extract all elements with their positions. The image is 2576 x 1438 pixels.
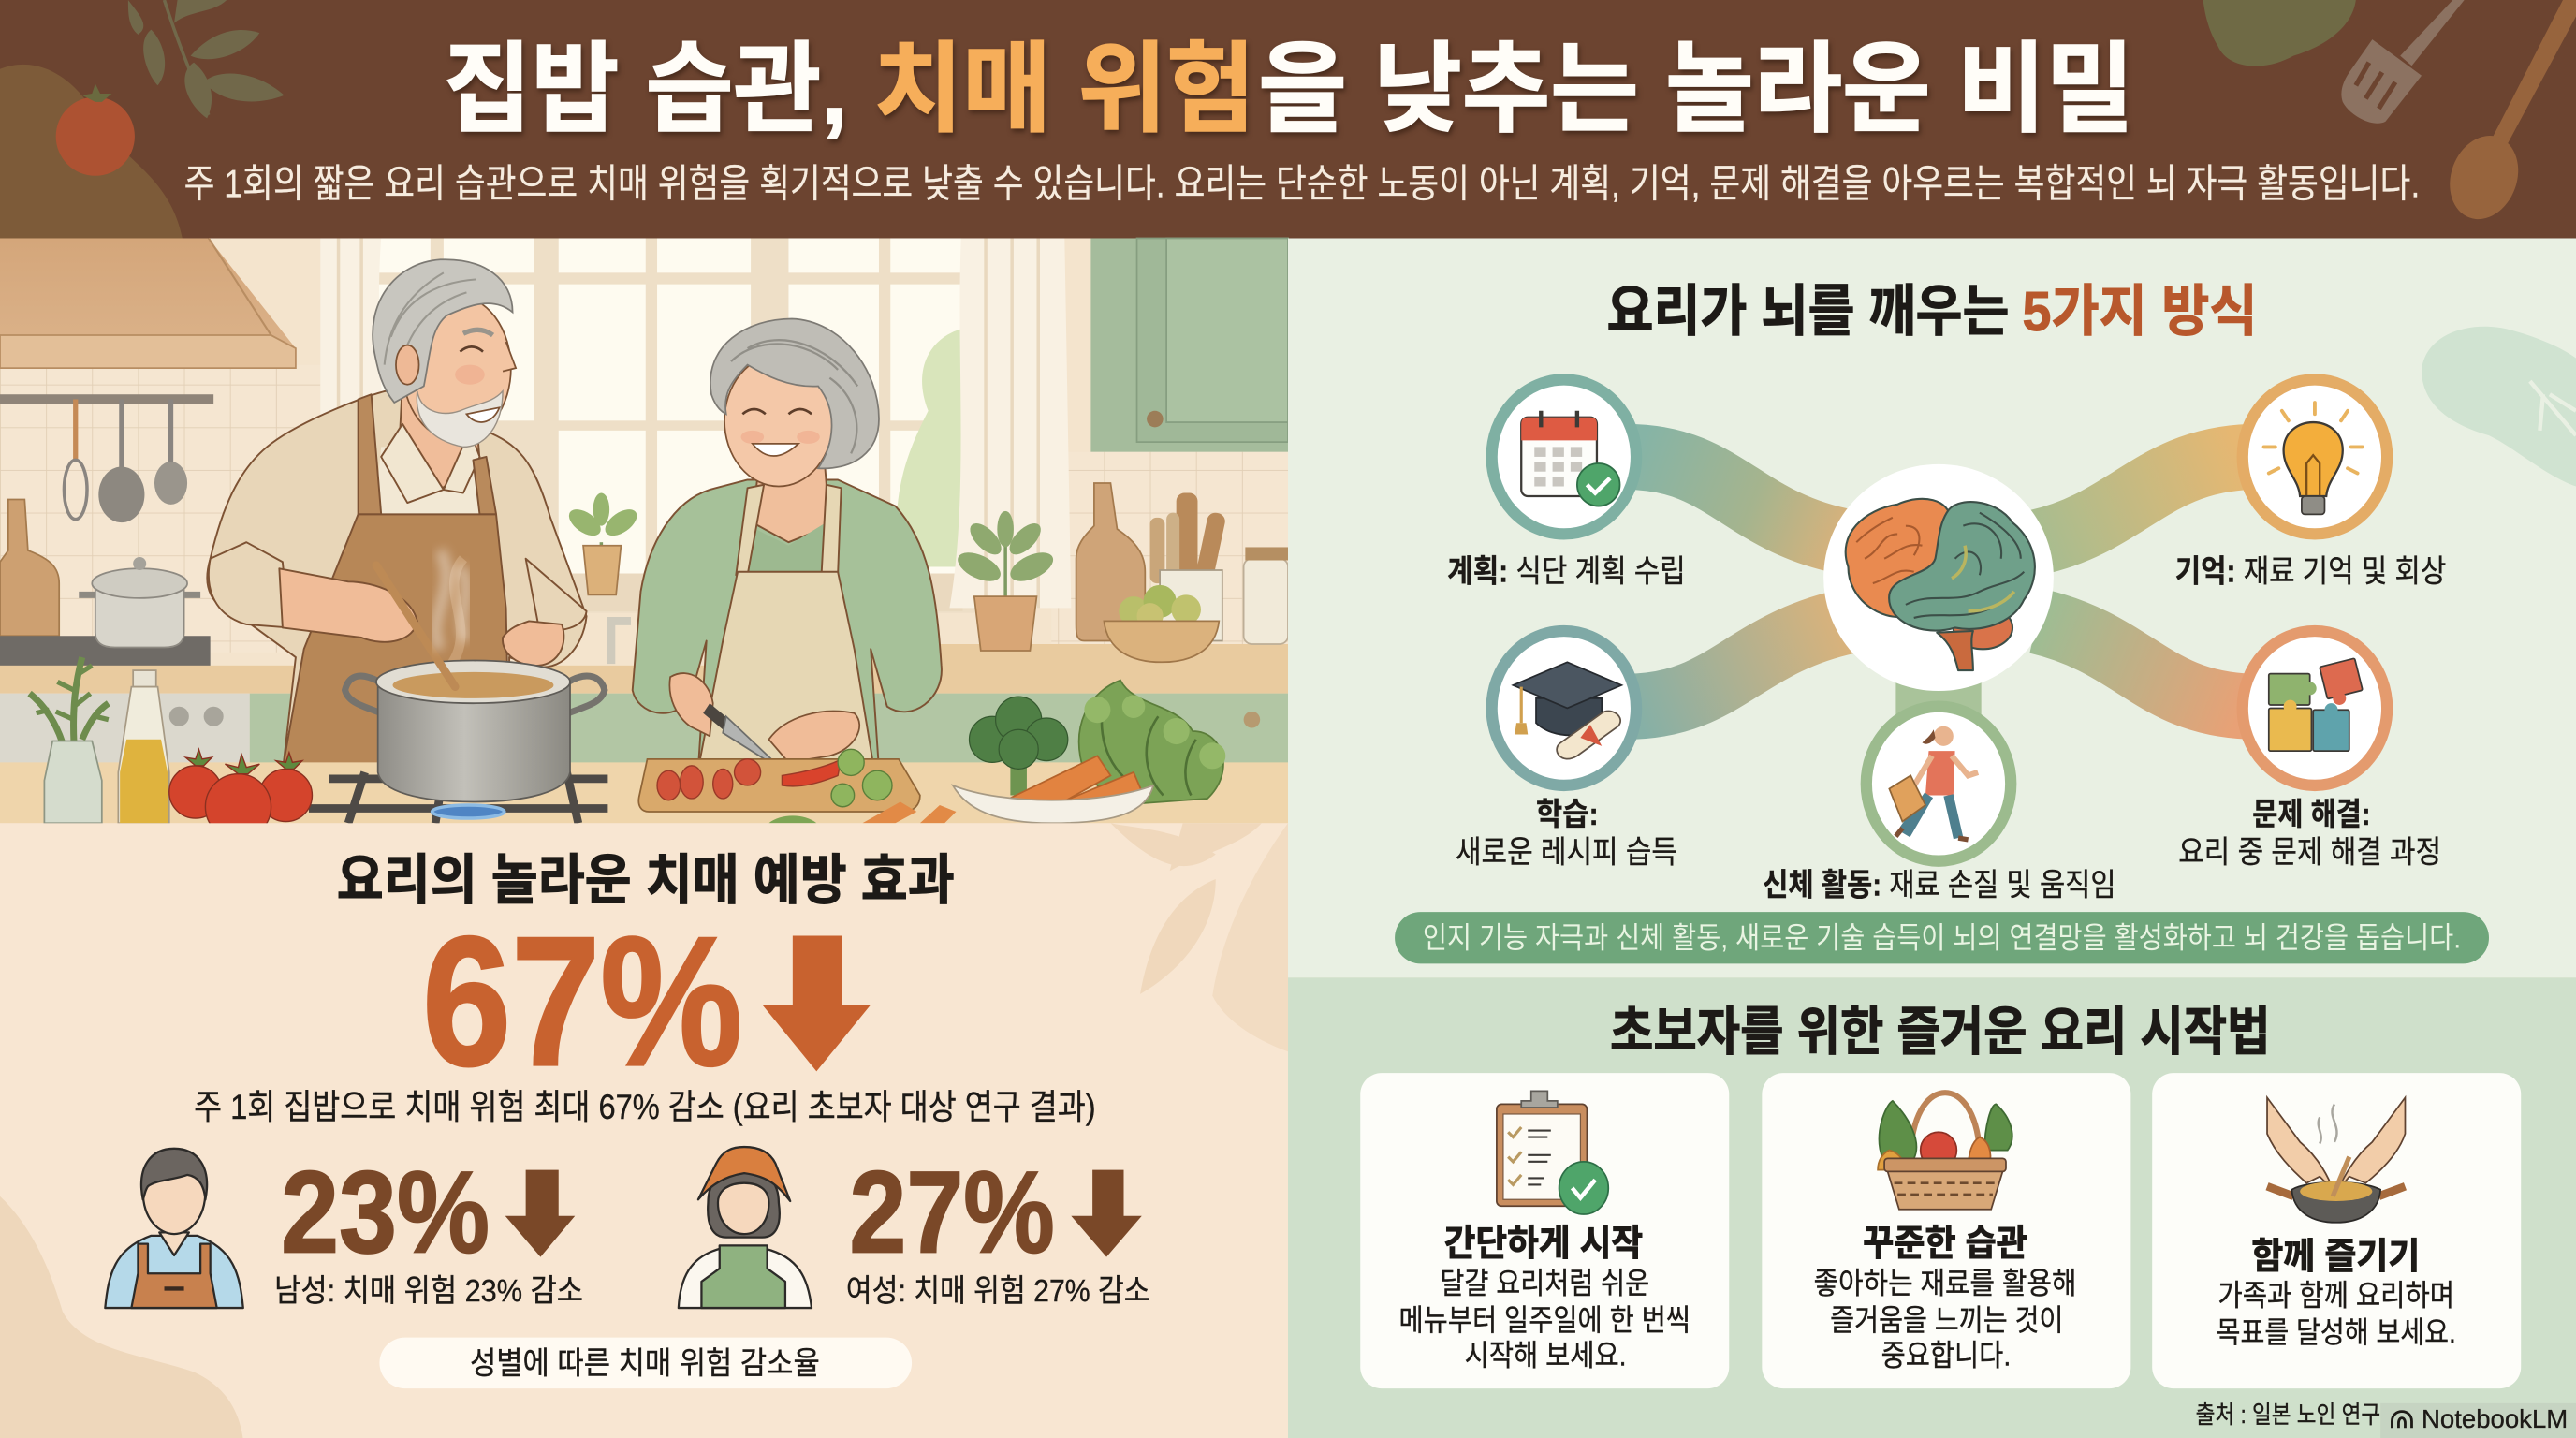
icon: woman in apron: [679, 1147, 812, 1308]
faucet: [611, 621, 631, 664]
label: problem solving: 요리 중 문제 해결 과정: [2178, 835, 2441, 870]
node: planning: [1492, 379, 1636, 534]
decoration: spatula: [2341, 0, 2465, 124]
decoration: leaf sprig: [1110, 823, 1288, 1051]
stat description: 주 1회 집밥으로 치매 위험 최대 67% 감소 (요리 초보자 대상 연구 결과): [194, 1088, 1096, 1126]
node: memory: [2243, 379, 2387, 534]
window plant: [564, 493, 641, 594]
card body: 시작해 보세요.: [1465, 1338, 1627, 1372]
stat: 67 percent: 67%: [422, 898, 742, 1104]
icon: calendar: [1521, 411, 1620, 506]
title: 치매 위험: [874, 36, 1255, 145]
decoration: tomato: [56, 84, 135, 176]
man right arm: [503, 559, 587, 666]
man head: [373, 259, 516, 447]
icon: graduation cap and diploma: [1513, 662, 1621, 759]
man: [207, 259, 587, 772]
icon: puzzle: [2269, 658, 2363, 751]
male label: 남성: 치매 위험 23% 감소: [274, 1274, 583, 1309]
summary pill: [1395, 912, 2489, 963]
section heading: 초보자를 위한 즐거운 요리 시작법: [1610, 1003, 2271, 1062]
panel: kitchen illustration: [0, 238, 1288, 840]
decoration: right blob: [2203, 0, 2356, 66]
wooden spoon and steam: [376, 550, 466, 687]
man left arm: [209, 542, 417, 642]
loose vegetables on counter: [768, 801, 956, 823]
card body: 즐거움을 느끼는 것이: [1830, 1303, 2063, 1337]
decoration: leaf: [2422, 327, 2576, 487]
icon: man in apron: [105, 1149, 243, 1308]
front counter: [0, 762, 1288, 823]
utensil rail: [0, 394, 213, 522]
source note: 출처 : 일본 노인 연구: [2196, 1401, 2380, 1429]
section heading: 요리가 뇌를 깨우는: [1606, 280, 2009, 343]
node: physical activity: [1866, 707, 2011, 861]
salad bowl with broccoli, lettuce, carrots: [953, 681, 1225, 823]
icon: hands stirring pan: [2267, 1097, 2405, 1223]
title: 을 낮추는 놀라운 비밀: [1258, 36, 2134, 145]
label: physical activity: 신체 활동: 재료 손질 및 움직임: [1763, 869, 2116, 903]
decoration: leaves: [128, 0, 285, 118]
right cutting board: [1076, 483, 1145, 640]
curtains: [320, 238, 1071, 608]
arrow: down 67: [762, 936, 871, 1071]
card: enjoy together: [2152, 1073, 2521, 1388]
label: problem solving: [2178, 798, 2441, 870]
icon: walking woman: [1889, 726, 1978, 840]
title: 집밥 습관,: [444, 36, 848, 145]
icon: vegetable basket: [1878, 1093, 2012, 1210]
right counter plant: [954, 511, 1058, 651]
label: learning: 새로운 레시피 습득: [1456, 835, 1677, 870]
card body: [2217, 1278, 2456, 1349]
section heading: 요리의 놀라운 치매 예방 효과: [337, 851, 955, 911]
knife: [703, 703, 785, 772]
label: planning: 계획: 식단 계획 수립: [1447, 554, 1686, 589]
utensil crock: [1150, 493, 1226, 640]
woman head: [710, 318, 879, 487]
oil bottle: [118, 670, 169, 823]
card body: 목표를 달성해 보세요.: [2217, 1315, 2456, 1349]
card body: 가족과 함께 요리하며: [2217, 1278, 2454, 1312]
arrow: down 27: [1071, 1170, 1142, 1257]
wall cutting board: [0, 500, 59, 636]
stat: 23 percent: 23%: [281, 1147, 490, 1277]
label: learning: [1456, 798, 1677, 870]
rosemary in vase: [30, 657, 109, 823]
card: start simple: [1360, 1073, 1729, 1388]
window: [320, 238, 986, 613]
gender caption pill: 성별에 따른 치매 위험 감소율: [470, 1346, 820, 1381]
big stock pot: [345, 661, 605, 801]
card heading: 꾸준한 습관: [1863, 1224, 2027, 1264]
decoration: wooden spoon: [2438, 0, 2576, 228]
card body: 중요합니다.: [1881, 1338, 2011, 1372]
icon: brain: [1846, 499, 2035, 670]
card body: [1814, 1266, 2076, 1372]
range hood: [0, 238, 296, 368]
summary pill: 인지 기능 자극과 신체 활동, 새로운 기술 습득이 뇌의 연결망을 활성화하고 뇌 건강을 돕습니다.: [1423, 921, 2461, 955]
stat: 27 percent: 27%: [849, 1147, 1055, 1277]
section heading: [1606, 280, 2258, 343]
card body: 좋아하는 재료를 활용해: [1814, 1266, 2076, 1299]
label: learning: 학습:: [1536, 798, 1599, 832]
back counter and cabinets: [0, 644, 1288, 766]
decoration: left blob: [0, 65, 183, 238]
NotebookLM watermark: [2380, 1403, 2576, 1438]
card body: 메뉴부터 일주일에 한 번씩: [1398, 1303, 1690, 1337]
node: learning: [1492, 631, 1636, 785]
label: memory: 기억: 재료 기억 및 회상: [2175, 554, 2446, 589]
card body: [1398, 1266, 1690, 1372]
card heading: 간단하게 시작: [1444, 1224, 1643, 1264]
card: steady habit: [1762, 1073, 2130, 1388]
NotebookLM watermark: NotebookLM: [2422, 1404, 2568, 1433]
connector bands: [1627, 457, 2250, 731]
woman: [633, 318, 942, 772]
saucepan on stove: [0, 557, 211, 668]
woman hands: [669, 673, 859, 762]
panel: beginner cooking tips: [1288, 977, 2576, 1438]
node: brain hub: [1823, 464, 2054, 691]
chopping board with vegetables: [638, 749, 920, 812]
green cabinet: [1090, 238, 1288, 452]
title: [444, 36, 2134, 145]
section heading: 5가지 방식: [2023, 280, 2258, 343]
card body: 달걀 요리처럼 쉬운: [1440, 1266, 1649, 1299]
icon: clipboard: [1497, 1091, 1608, 1214]
tomatoes: [169, 749, 312, 840]
female label: 여성: 치매 위험 27% 감소: [846, 1274, 1150, 1309]
panel: five ways cooking wakes the brain: [1288, 238, 2576, 977]
card heading: 함께 즐기기: [2251, 1237, 2420, 1277]
panel: cooking prevention effect: [0, 823, 1288, 1438]
panel: header band: [0, 0, 2576, 238]
label: problem solving: 문제 해결:: [2252, 798, 2371, 832]
node: problem solving: [2243, 631, 2387, 785]
arrow: down 23: [505, 1170, 575, 1257]
stove burners: [309, 772, 607, 823]
glass jar: [1244, 547, 1288, 644]
icon: light bulb: [2264, 403, 2363, 514]
decoration: bottom-left blob: [0, 1196, 243, 1438]
gender caption pill: [379, 1338, 912, 1388]
fruit bowl: [1104, 585, 1219, 662]
